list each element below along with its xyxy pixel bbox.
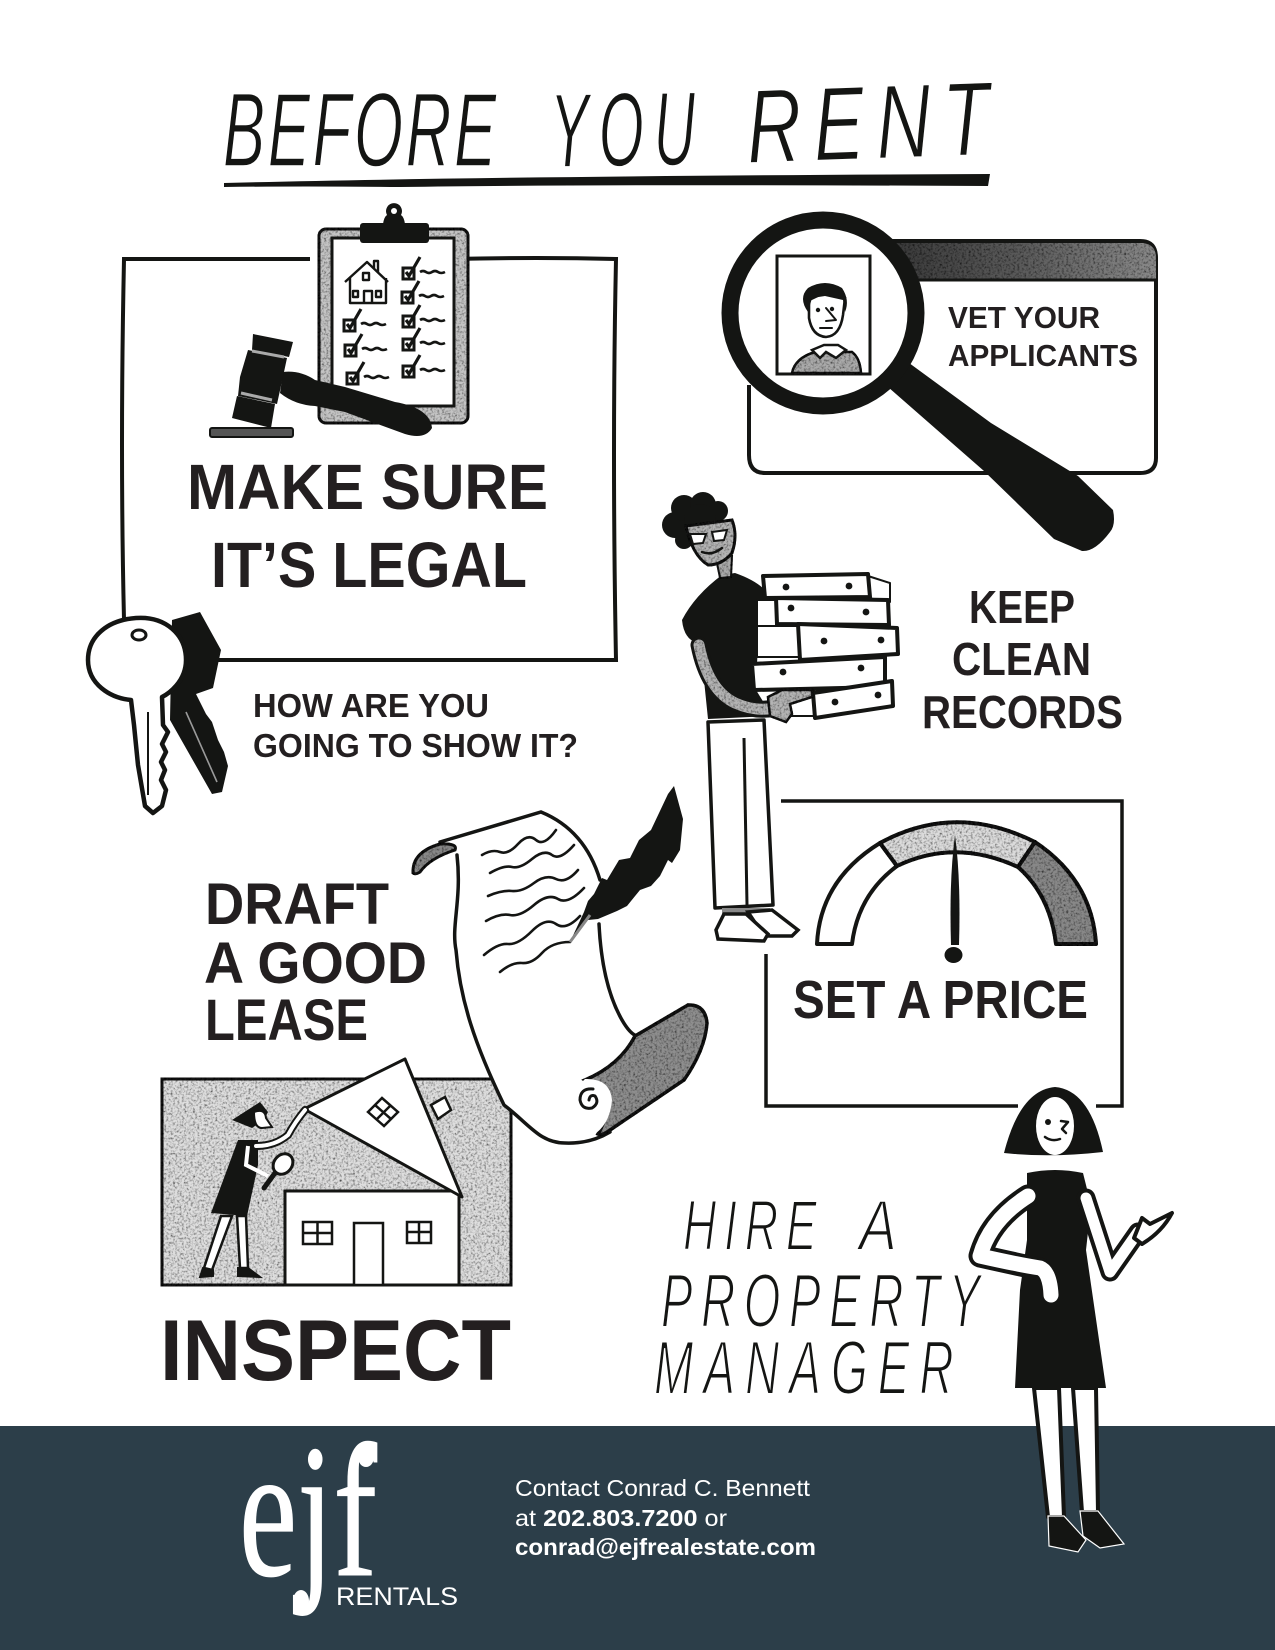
- icon: keys: [88, 612, 228, 813]
- heading: make sure it's legal: [187, 451, 548, 601]
- contact details: [515, 1475, 816, 1560]
- label: draft a good lease: A GOOD: [204, 931, 427, 996]
- label: how are you going to show it: HOW ARE YOU: [253, 687, 489, 724]
- panel: inspect illustration: [162, 1059, 511, 1285]
- left arm: [980, 1196, 1051, 1295]
- label: hire a property manager: [654, 1186, 989, 1411]
- contact details: conrad@ejfrealestate.com: [515, 1534, 816, 1560]
- icon: man carrying binders: [662, 492, 898, 941]
- scroll top curl: [413, 844, 455, 874]
- icon: gavel: [210, 334, 432, 437]
- dress: [1015, 1170, 1106, 1388]
- panel: vet your applicants: [749, 241, 1156, 473]
- hair: [662, 492, 728, 549]
- label: how are you going to show it: GOING TO SHOW IT?: [253, 727, 578, 764]
- label: how are you going to show it: [253, 687, 578, 764]
- title: RENT: [745, 60, 1003, 186]
- shirt: [682, 573, 772, 719]
- title underline: [224, 174, 990, 187]
- label: draft a good lease: LEASE: [205, 988, 368, 1053]
- checklist: [344, 257, 445, 384]
- label: vet your applicants: APPLICANTS: [948, 338, 1138, 373]
- written lines: [482, 830, 584, 972]
- shoes: [716, 908, 798, 941]
- icon: small house: [345, 261, 388, 303]
- label: vet your applicants: [948, 300, 1138, 373]
- panel: set a price: [766, 801, 1122, 1106]
- scroll paper: [443, 812, 635, 1143]
- hand: [768, 690, 812, 722]
- title: BEFORE: [223, 73, 499, 189]
- title: [223, 60, 1003, 189]
- label: keep clean records: RECORDS: [922, 686, 1123, 738]
- figure inspecting: [200, 1102, 305, 1277]
- gauge: [817, 822, 1096, 963]
- contact details: at 202.803.7200 or: [515, 1505, 727, 1531]
- label: draft a good lease: DRAFT: [205, 872, 389, 937]
- neck: [716, 556, 732, 578]
- icon: clipboard: [319, 203, 468, 423]
- logo: ejf rentals: RENTALS: [336, 1583, 458, 1611]
- hair: [1004, 1087, 1103, 1155]
- logo: ejf rentals: ejf: [239, 1407, 378, 1617]
- label: keep clean records: [922, 581, 1123, 738]
- legs: [1034, 1388, 1098, 1517]
- icon: magnifying glass with applicant photo: [730, 220, 1114, 551]
- arm: [699, 645, 775, 709]
- icon: scroll and quill: [413, 786, 707, 1143]
- icon: property manager woman: [980, 1087, 1172, 1552]
- title: YOU: [549, 69, 706, 189]
- panel: make sure it's legal: [122, 258, 616, 660]
- right arm: [1086, 1198, 1172, 1272]
- front key: [88, 618, 186, 813]
- binders: [752, 574, 898, 718]
- heading: make sure it's legal: MAKE SURE: [187, 451, 548, 523]
- face: [686, 520, 735, 565]
- footer band: [0, 1426, 1275, 1650]
- back key: [170, 612, 228, 794]
- heading: inspect: INSPECT: [160, 1303, 511, 1399]
- label: hire a property manager: PROPERTY: [661, 1260, 989, 1344]
- label: hire a property manager: MANAGER: [654, 1327, 964, 1411]
- label: keep clean records: KEEP: [969, 581, 1075, 633]
- gauge needle: [944, 835, 962, 963]
- label: draft a good lease: [204, 872, 427, 1053]
- applicant photo: [777, 256, 870, 374]
- label: vet your applicants: VET YOUR: [948, 300, 1100, 335]
- house: [285, 1059, 462, 1285]
- quill: [570, 786, 683, 942]
- trousers: [708, 720, 773, 908]
- shoes: [1048, 1511, 1124, 1552]
- heading: set a price: SET A PRICE: [793, 970, 1088, 1030]
- label: keep clean records: CLEAN: [952, 633, 1091, 685]
- label: hire a property manager: HIRE: [683, 1186, 824, 1265]
- label: hire a property manager: A: [855, 1186, 897, 1265]
- heading: make sure it's legal: IT’S LEGAL: [211, 529, 527, 601]
- scroll bottom roll: [585, 1005, 707, 1134]
- face: [1036, 1097, 1074, 1155]
- contact details: Contact Conrad C. Bennett: [515, 1475, 810, 1501]
